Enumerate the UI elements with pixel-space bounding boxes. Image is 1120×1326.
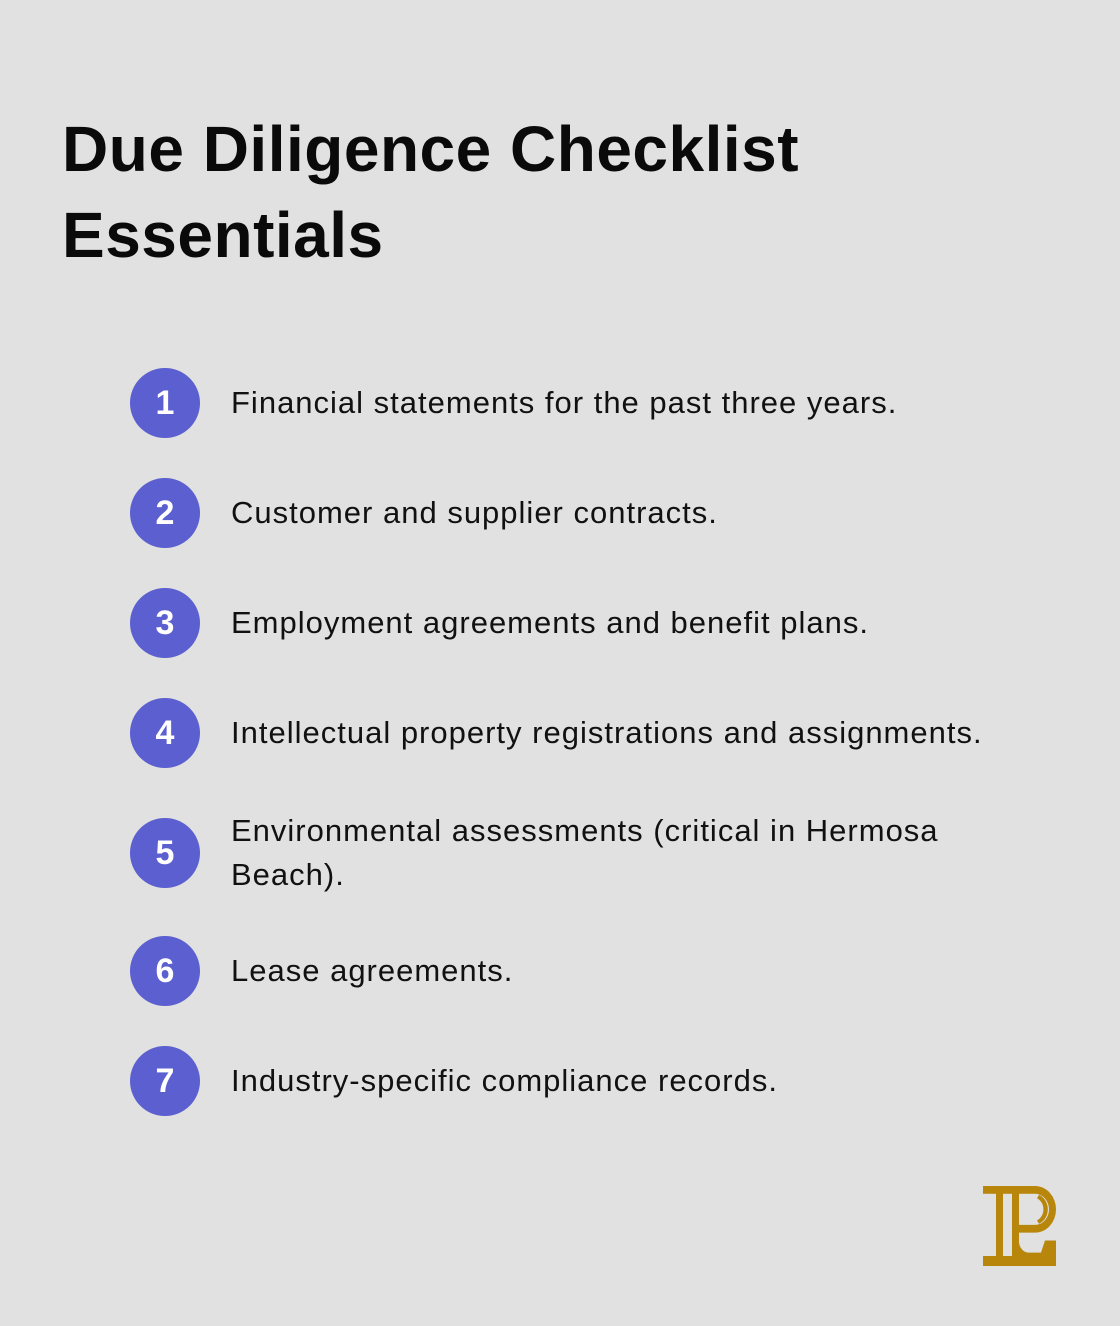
item 5: 5: [156, 834, 174, 872]
item 7: Industry-specific compliance records.: [231, 1063, 778, 1098]
item 2: [130, 478, 718, 548]
item 6: [130, 936, 513, 1006]
item 6: Lease agreements.: [231, 953, 513, 988]
title: Essentials: [62, 199, 384, 271]
item 1: [130, 368, 897, 438]
item 5: Environmental assessments (critical in Hermosa Beach).: [231, 813, 939, 892]
item 6: 6: [156, 952, 174, 990]
item 1: Financial statements for the past three years.: [231, 385, 897, 420]
item 7: [130, 1046, 778, 1116]
item 4: [130, 698, 983, 768]
item 3: 3: [156, 604, 174, 642]
title: [62, 113, 799, 271]
item 2: Customer and supplier contracts.: [231, 495, 718, 530]
item 4: Intellectual property registrations and assignments.: [231, 715, 983, 750]
title: Due Diligence Checklist: [62, 113, 799, 185]
item 7: 7: [156, 1062, 174, 1100]
item 4: 4: [156, 714, 174, 752]
item 1: 1: [156, 384, 174, 422]
logo: [983, 1186, 1056, 1266]
item 3: Employment agreements and benefit plans.: [231, 605, 869, 640]
item 2: 2: [156, 494, 174, 532]
item 3: [130, 588, 869, 658]
